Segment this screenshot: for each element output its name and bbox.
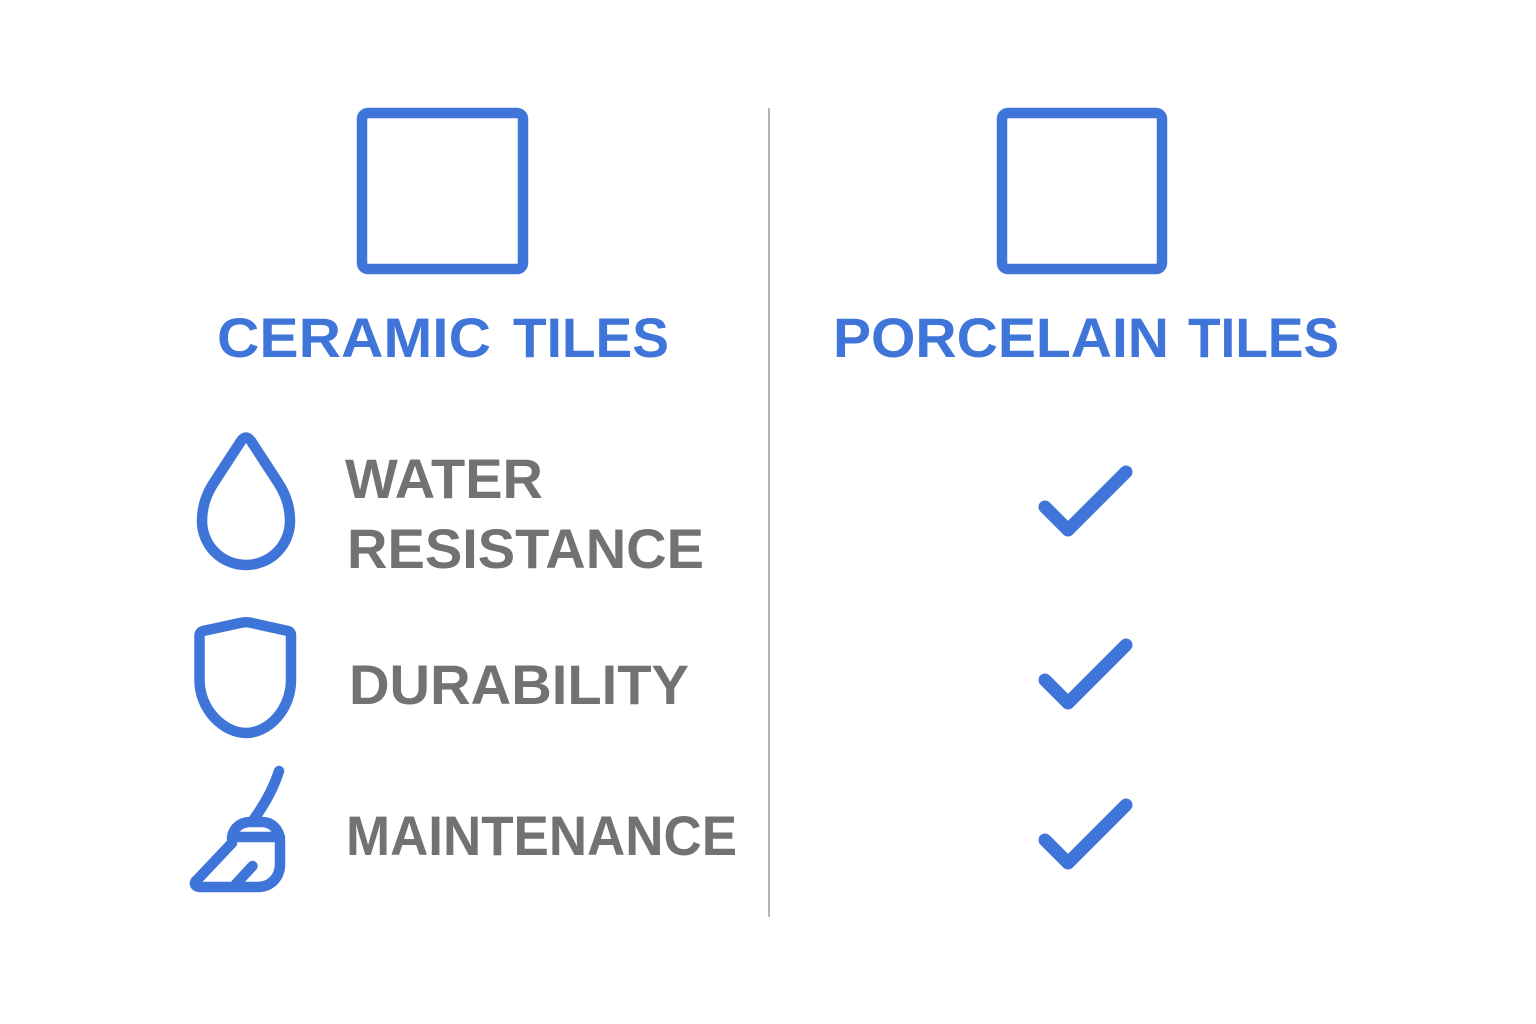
heading: ceramic tiles: TILES [513,306,669,369]
icon: water drop [202,438,290,565]
heading: ceramic tiles: CERAMIC [217,306,491,369]
label: maintenance: MAINTENANCE [346,804,737,867]
icon: check durability [1045,645,1126,703]
icon: ceramic tile square [362,113,523,269]
icon: check water resistance [1045,472,1126,530]
row: durability [200,622,689,733]
heading: porcelain tiles: PORCELAIN [833,306,1169,369]
row: water resistance [202,438,704,580]
icon: check maintenance [1045,805,1126,863]
label: durability: DURABILITY [349,653,689,716]
panel: ceramic tiles column [195,113,737,887]
heading: porcelain tiles: TILES [1188,306,1339,369]
panel: porcelain tiles column [833,113,1339,863]
label: water resistance: RESISTANCE [347,517,704,580]
icon: porcelain tile square [1002,113,1162,269]
row: maintenance [195,771,737,887]
label: water resistance: WATER [345,447,543,510]
icon: shield [200,622,291,733]
icon: broom [195,771,280,887]
